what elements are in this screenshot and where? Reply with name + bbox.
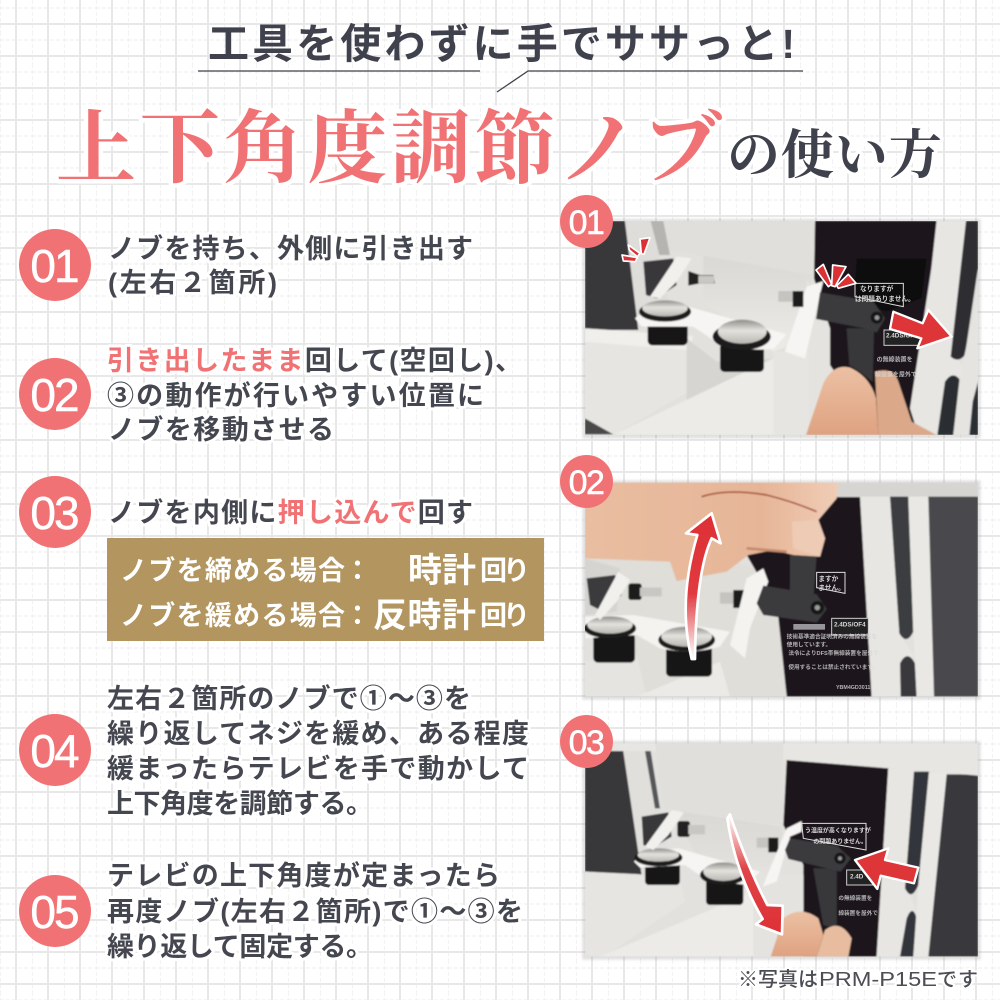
photo panel 02 bbox=[582, 480, 981, 700]
tighten and loosen callout: 回り bbox=[480, 601, 530, 631]
step 05 text: 繰り返して固定する。 bbox=[107, 932, 373, 962]
step 02 text: 引き出したまま回して(空回し)、 bbox=[107, 346, 522, 376]
icon: left emphasis marks bbox=[622, 238, 650, 262]
footnote bbox=[738, 968, 978, 991]
step 01 bbox=[19, 229, 473, 301]
photo label text bbox=[787, 572, 879, 691]
step 05 text: 再度ノブ(左右２箇所)で①〜③を bbox=[107, 896, 523, 927]
step 03 bbox=[19, 476, 544, 641]
step 04 number badge: 04 bbox=[30, 725, 79, 777]
subtitle: 工具を使わずに手でササっと! bbox=[208, 21, 795, 67]
photo panel 03 bbox=[582, 741, 981, 960]
photo badge 01 bbox=[560, 195, 613, 248]
tighten and loosen callout: ノブを緩める場合 bbox=[120, 600, 345, 631]
tighten and loosen callout: ： bbox=[344, 556, 371, 586]
photo label text: 2.4DS/OF4 bbox=[886, 333, 918, 340]
photo label text: ますか bbox=[818, 575, 839, 583]
photo label text: なりますが bbox=[860, 284, 894, 293]
tighten and loosen callout: ： bbox=[344, 601, 371, 631]
step 02 bbox=[19, 346, 522, 445]
tighten and loosen callout bbox=[107, 538, 544, 641]
step 04 text: 左右２箇所のノブで①〜③を bbox=[107, 683, 471, 714]
photo label text: 2.4DS/OF4 bbox=[834, 621, 866, 628]
step 05 bbox=[19, 860, 523, 962]
footnote: PRM-P15E bbox=[819, 969, 937, 991]
icon: pull-out arrow bbox=[890, 310, 952, 348]
photo label text: ません。 bbox=[818, 584, 845, 592]
step 04 text bbox=[107, 683, 529, 819]
step 01 text bbox=[108, 233, 473, 298]
photo label text bbox=[855, 283, 923, 379]
step 02 number badge bbox=[19, 358, 91, 430]
icon: curved upward arrow bbox=[686, 513, 721, 659]
icon: curved downward arrow bbox=[727, 814, 783, 934]
photo label text: の問題ありません。 bbox=[813, 837, 867, 845]
tighten and loosen callout: 時計 bbox=[408, 552, 476, 590]
tighten and loosen callout: 回り bbox=[480, 556, 530, 586]
step 01 text: (左右２箇所) bbox=[108, 268, 277, 298]
step 01 number badge: 01 bbox=[30, 240, 78, 292]
speech-line under subtitle bbox=[198, 71, 803, 92]
photo label text: 2.4D bbox=[850, 873, 864, 880]
photo label text: は問題ありません。 bbox=[855, 294, 915, 303]
step 01 text: ノブを持ち、外側に引き出す bbox=[108, 233, 473, 264]
photo label text: 使用しています。 bbox=[787, 641, 831, 649]
photo label text: 使用することは禁止されています。 bbox=[788, 663, 878, 671]
step 05 text: テレビの上下角度が定まったら bbox=[107, 860, 500, 891]
photo label text: 技術基準適合証明済みの無線装置を bbox=[787, 632, 878, 640]
icon: knob emphasis marks bbox=[816, 264, 856, 288]
photo label text: 法令によりDFS帯無線装置を屋外で bbox=[788, 649, 879, 657]
step 04 text: 緩まったらテレビを手で動かして bbox=[107, 754, 529, 784]
icon: push-in arrow bbox=[855, 848, 918, 889]
photo badge 03 bbox=[560, 715, 613, 768]
step 02 text: ノブを移動させる bbox=[108, 414, 334, 445]
photo label text: の無線装置を bbox=[877, 356, 913, 364]
step 03 number badge bbox=[19, 476, 91, 548]
photo label text: う温度が高くなりますが bbox=[805, 826, 871, 834]
photo label text: YBM4GD3011 bbox=[836, 685, 870, 691]
photo badge 02: 02 bbox=[569, 464, 604, 502]
step 05 number badge bbox=[19, 875, 91, 947]
step 02 text: ③の動作が行いやすい位置に bbox=[107, 380, 484, 411]
header bbox=[56, 21, 942, 194]
photo panel 01 bbox=[582, 219, 981, 438]
photo badge 02 bbox=[560, 455, 613, 508]
title suffix: の使い方 bbox=[727, 126, 942, 185]
step 03 text: ノブを内側に押し込んで回す bbox=[108, 497, 473, 528]
step 02 number badge: 02 bbox=[30, 369, 78, 421]
photo label text: の無線装置を bbox=[838, 894, 873, 902]
footnote: です bbox=[937, 969, 978, 991]
step 04 text: 上下角度を調節する。 bbox=[107, 789, 373, 819]
photo label text: 線装置を屋外で bbox=[838, 909, 878, 917]
tighten and loosen callout: 反時計 bbox=[373, 597, 476, 635]
photo label text bbox=[802, 823, 878, 917]
step 04 number badge bbox=[19, 714, 91, 786]
step 04 text: 繰り返してネジを緩め、ある程度 bbox=[107, 719, 529, 749]
step 05 text bbox=[107, 860, 523, 962]
photo badge 03: 03 bbox=[569, 724, 604, 762]
footnote: ※写真は bbox=[738, 968, 818, 991]
step 01 number badge bbox=[19, 229, 91, 301]
main title: 上下角度調節ノブ bbox=[56, 106, 722, 194]
photo label text: 線装置を屋外で bbox=[875, 371, 917, 379]
tighten and loosen callout: ノブを締める場合 bbox=[120, 555, 345, 586]
step 03 number badge: 03 bbox=[30, 487, 78, 539]
step 05 number badge: 05 bbox=[30, 886, 78, 938]
photo badge 01: 01 bbox=[569, 204, 604, 242]
step 02 text bbox=[107, 346, 522, 445]
step 04 bbox=[19, 683, 529, 819]
